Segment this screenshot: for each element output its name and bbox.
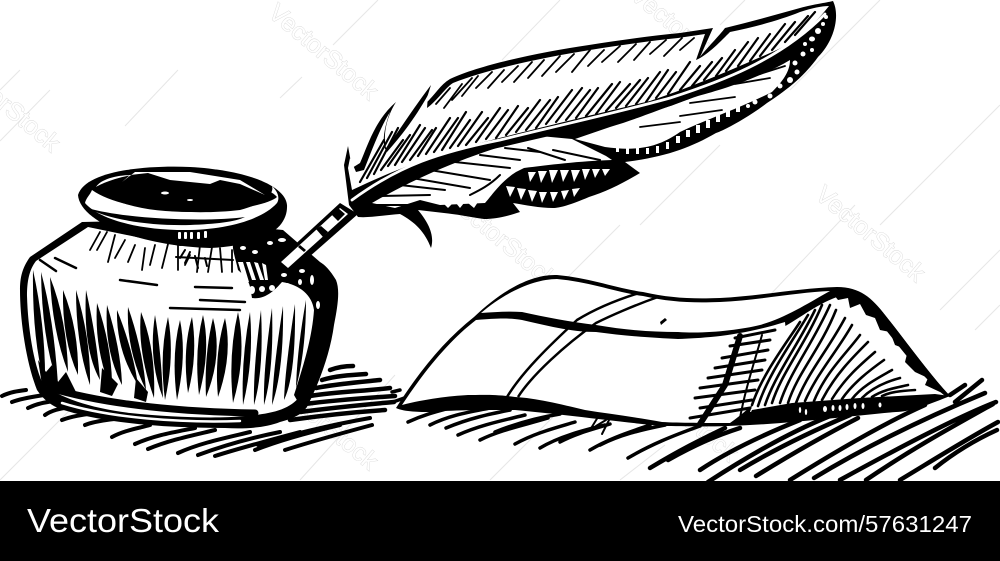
dark shading on right shoulder [233, 232, 328, 402]
watermark: VectorStock text marks [0, 0, 931, 476]
lower left vane strokes [372, 148, 600, 205]
paper feathered shadow edge [690, 330, 775, 424]
quill shaft [276, 203, 358, 272]
feather silhouette [344, 1, 836, 248]
ground hatching under paper [392, 380, 998, 482]
rachis [352, 14, 825, 200]
upper vane hatching [360, 12, 815, 182]
watermark: VectorStock text marks: VectorStock [442, 186, 563, 294]
dark teeth at base left [38, 360, 76, 392]
paper front face [402, 318, 786, 423]
paper silhouette [396, 275, 950, 426]
scallop highlights [444, 169, 610, 208]
ground shadow hatching under inkwell [2, 366, 395, 456]
folded paper [396, 275, 950, 426]
paper fold band [507, 293, 658, 397]
lower right vane strokes [640, 66, 785, 127]
jar neck and lip [78, 167, 287, 248]
shoulder short strokes [40, 232, 245, 310]
watermark: VectorStock text marks: VectorStock [85, 180, 206, 288]
paper end dark edge [830, 289, 950, 396]
white speckles on dark shading [235, 238, 320, 309]
watermark: VectorStock text marks: VectorStock [263, 0, 384, 106]
watermark: VectorStock text marks: VectorStock [623, 360, 744, 468]
paper top face [481, 279, 830, 333]
watermark: VectorStock text marks: VectorStock [810, 180, 931, 288]
speckled tip [616, 10, 828, 154]
vertical hatching on jar body [33, 270, 306, 405]
inkwell [20, 167, 338, 428]
footer image id text: VectorStock.com/57631247 [678, 511, 972, 537]
watermark: VectorStock text marks: VectorStock [263, 368, 384, 476]
jar body [20, 220, 338, 428]
bottom rim reflection [50, 388, 255, 421]
paper end hatching [750, 296, 945, 412]
upper vane [348, 6, 829, 190]
lower left vane [372, 136, 612, 208]
footer logo text: VectorStock [27, 502, 220, 539]
lower right vane [575, 60, 790, 149]
feather quill [276, 1, 836, 272]
bottom black footer bar [0, 481, 1000, 561]
